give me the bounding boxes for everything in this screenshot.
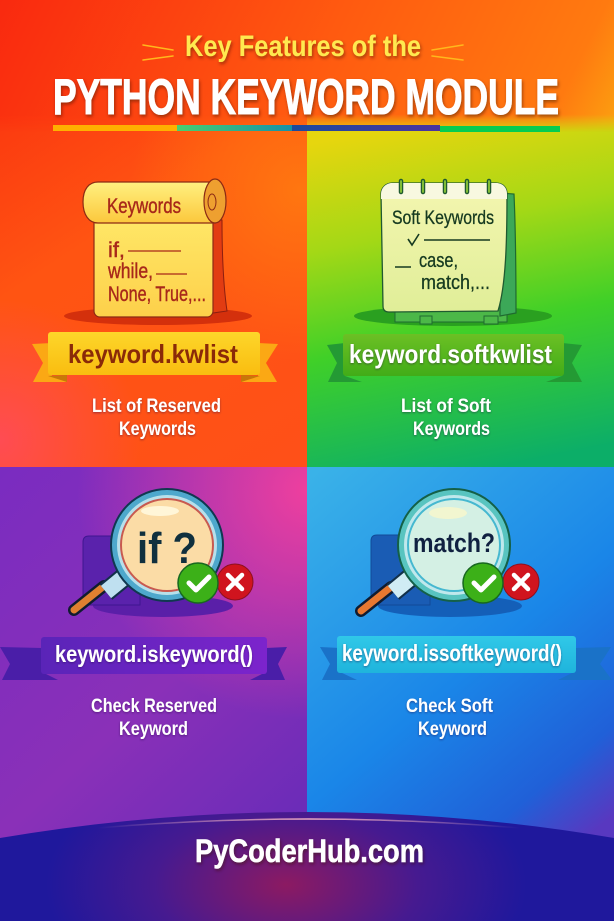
banner label: keyword.iskeyword(): [55, 641, 253, 667]
scroll text: [107, 195, 206, 306]
description: [401, 396, 492, 440]
ribbon banner: [32, 332, 278, 382]
ribbon banner: [327, 334, 582, 382]
description: [92, 396, 221, 440]
scroll text: while,: [107, 260, 153, 283]
description: [406, 696, 494, 740]
icon: notebook: [354, 181, 552, 326]
description: Keywords: [413, 419, 490, 440]
banner label: keyword.kwlist: [68, 339, 238, 369]
footer website label: PyCoderHub.com: [195, 833, 424, 869]
panel: keyword.softkwlist: [327, 181, 582, 440]
description: [91, 696, 217, 740]
notebook text: case,: [419, 250, 458, 272]
footer band: [0, 812, 614, 921]
description: Keywords: [119, 419, 196, 440]
icon: scroll: [64, 179, 252, 325]
subtitle: Key Features of the: [185, 30, 421, 63]
panel: keyword.kwlist: [32, 179, 278, 440]
decorative sparkle lines right: [432, 45, 463, 60]
scroll text: if,: [108, 239, 125, 262]
scroll text: Keywords: [107, 195, 181, 218]
icon: red cross: [503, 564, 539, 600]
banner label: keyword.softkwlist: [349, 339, 552, 369]
icon: magnifier with if?: [74, 489, 253, 617]
icon: magnifier with match?: [361, 489, 539, 617]
banner label: keyword.issoftkeyword(): [342, 640, 562, 666]
lens text: match?: [413, 528, 495, 558]
decorative sparkle lines left: [143, 45, 173, 60]
panel: keyword.issoftkeyword(): [320, 489, 612, 740]
description: List of Soft: [401, 396, 492, 417]
icon: green check: [463, 563, 503, 603]
footer highlight arc: [98, 819, 520, 828]
description: Keyword: [418, 719, 487, 740]
description: Keyword: [119, 719, 188, 740]
description: Check Reserved: [91, 696, 217, 717]
notebook rings: [401, 181, 489, 192]
notebook text: Soft Keywords: [392, 208, 494, 229]
description: List of Reserved: [92, 396, 221, 417]
notebook text: [392, 208, 494, 294]
icon: green check: [178, 563, 218, 603]
ribbon banner: [0, 637, 287, 680]
header: [53, 30, 560, 132]
ribbon banner: [320, 636, 612, 680]
icon: red cross: [217, 564, 253, 600]
notebook text: match,...: [421, 272, 490, 294]
panel: keyword.iskeyword(): [0, 489, 287, 740]
description: Check Soft: [406, 696, 494, 717]
scroll text: None, True,...: [108, 283, 206, 306]
multicolour title underline: [53, 125, 560, 132]
lens text: if ?: [137, 524, 197, 573]
